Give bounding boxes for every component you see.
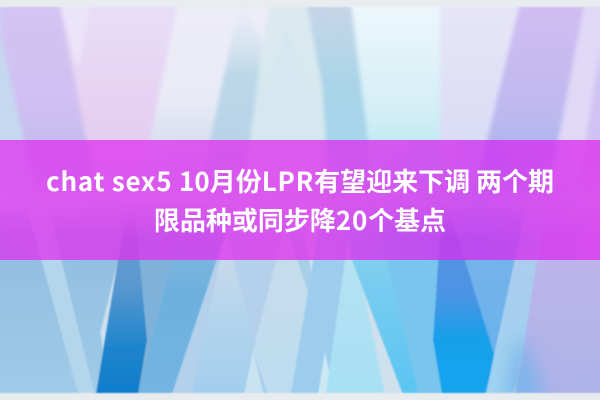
title band <box>0 140 600 260</box>
title: 限品种或同步降20个基点 <box>154 201 446 238</box>
bottom edge strip <box>0 393 600 400</box>
lower beams <box>0 220 104 394</box>
upper beams <box>0 49 20 140</box>
title <box>46 162 554 238</box>
title: chat sex5 10月份LPR有望迎来下调 两个期 <box>46 162 554 199</box>
top edge strip <box>0 0 600 7</box>
